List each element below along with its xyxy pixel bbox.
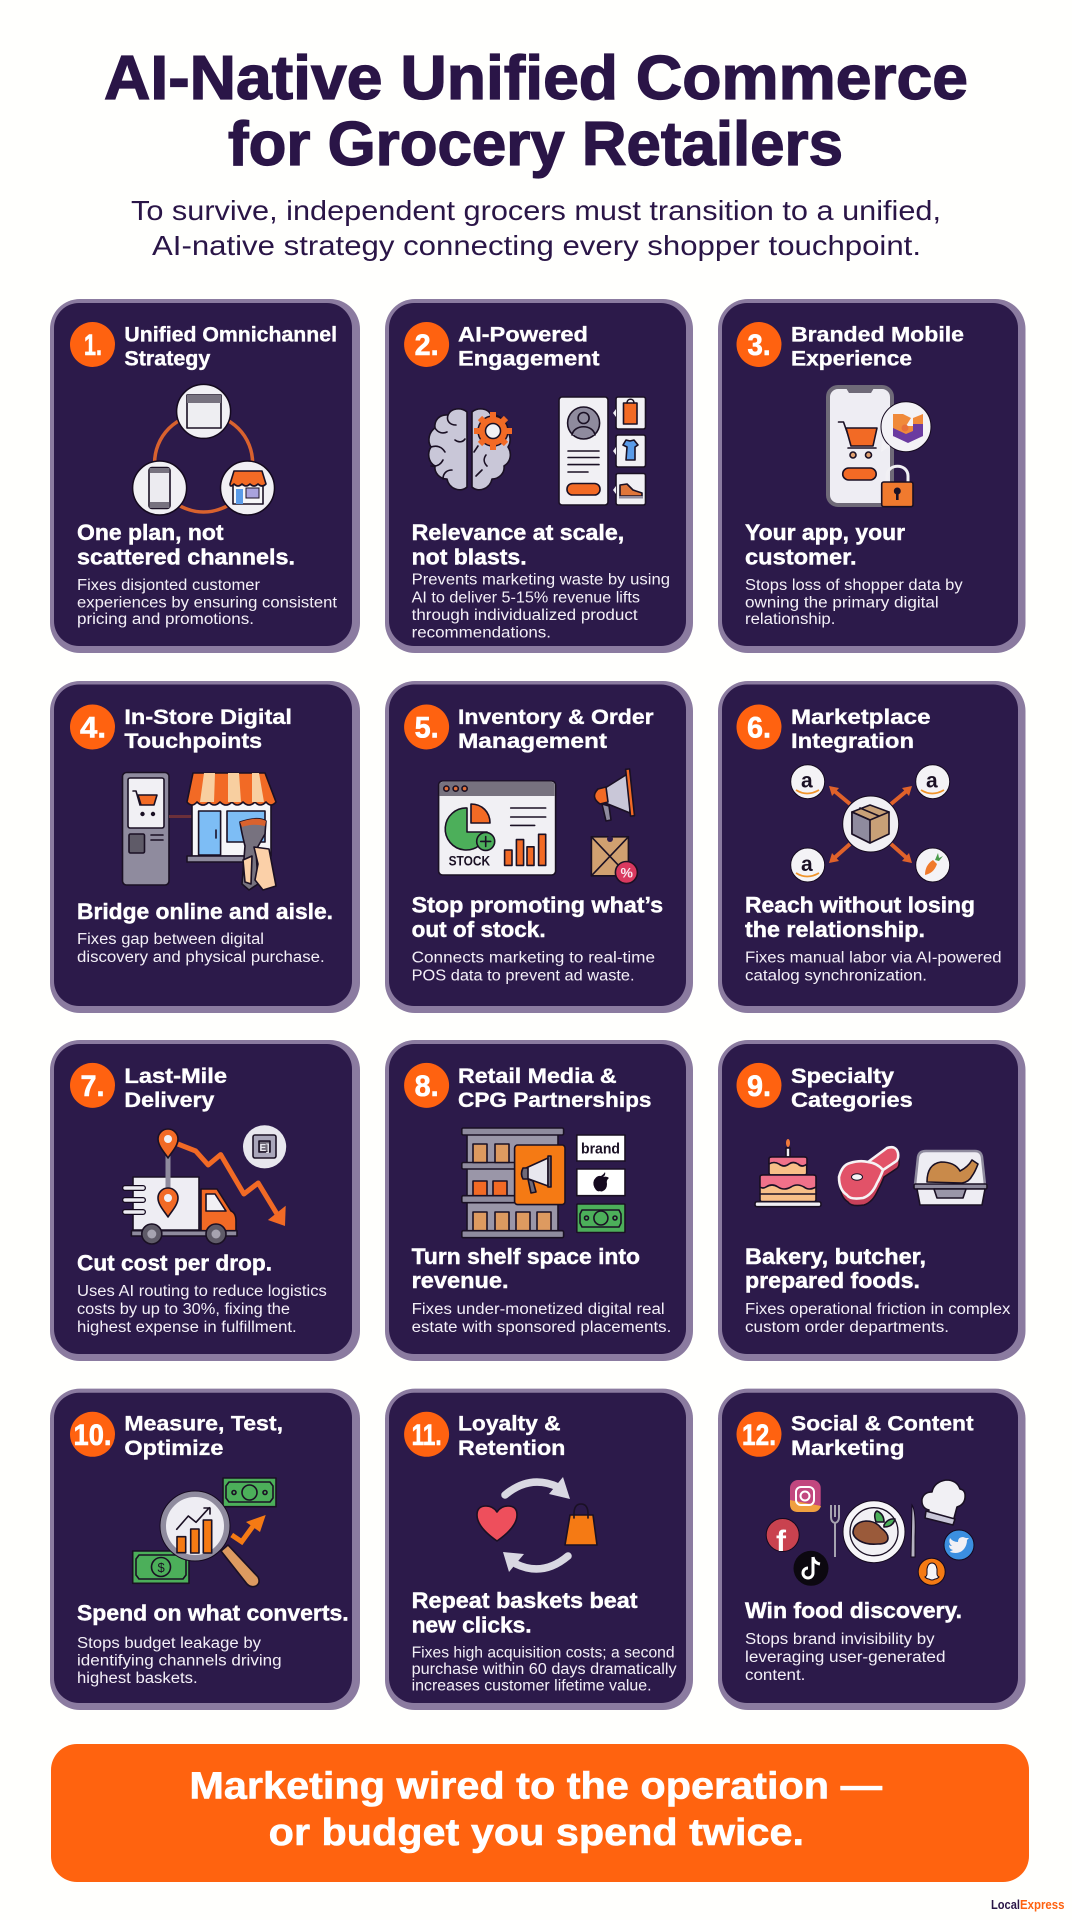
icon: megaphone <box>594 769 634 821</box>
body text 3: Stops loss of shopper data by <box>745 577 963 594</box>
panel: 7 last-mile delivery <box>50 1040 360 1361</box>
heading 11 <box>458 1413 565 1460</box>
icon: discounted parcel <box>591 836 637 884</box>
icon: prepared food container <box>914 1151 987 1205</box>
tagline 3: customer. <box>745 544 857 570</box>
body text 9: custom order departments. <box>745 1319 949 1336</box>
number badge 6: 6. <box>747 712 771 744</box>
connector line <box>169 815 192 818</box>
tagline 5: out of stock. <box>412 917 546 942</box>
heading 10 <box>124 1413 283 1460</box>
number badge 6 <box>736 704 782 750</box>
heading 9 <box>791 1065 913 1112</box>
panel: 5 inventory and order management <box>385 681 693 1013</box>
heading 5 <box>458 706 654 753</box>
tagline 11: new clicks. <box>412 1612 532 1638</box>
icon: marketplace hub: a <box>926 770 938 792</box>
icon: repeat cycle with heart and bag <box>477 1477 597 1572</box>
tagline 4: Bridge online and aisle. <box>77 899 333 924</box>
number badge 4: 4. <box>80 712 106 744</box>
icon: storefront with barcode scanner and hand <box>187 773 276 890</box>
icon: magnifier with chart and money <box>133 1478 276 1587</box>
body text 2: through individualized product <box>412 607 638 624</box>
heading 2 <box>458 324 600 370</box>
number badge 12 <box>736 1412 782 1457</box>
heading 10: Optimize <box>124 1437 223 1460</box>
icon: delivery truck with route pins: E] <box>260 1143 270 1154</box>
panel: 4 in-store digital touchpoints <box>50 681 360 1013</box>
panel: 8 retail media and CPG partnerships <box>385 1040 693 1361</box>
tagline 9: Bakery, butcher, <box>745 1244 926 1269</box>
tagline 3 <box>745 520 905 570</box>
heading 8 <box>458 1065 652 1112</box>
heading 10: Measure, Test, <box>124 1413 283 1436</box>
body text 4: discovery and physical purchase. <box>77 949 325 966</box>
heading 7 <box>124 1065 227 1112</box>
body text 9: Fixes operational friction in complex <box>745 1301 1011 1318</box>
heading 6 <box>791 706 930 753</box>
number badge 2 <box>404 322 449 367</box>
body text 1 <box>77 577 338 628</box>
tagline 2: not blasts. <box>412 544 527 570</box>
body text 3 <box>745 577 963 628</box>
body text 8 <box>412 1301 671 1336</box>
body text 3: owning the primary digital <box>745 594 939 612</box>
heading 5: Inventory & Order <box>458 706 654 729</box>
body text 7: costs by up to 30%, fixing the <box>77 1301 290 1318</box>
body text 12: Stops brand invisibility by <box>745 1631 935 1648</box>
heading 2: AI-Powered <box>458 324 588 346</box>
body text 8: estate with sponsored placements. <box>412 1319 671 1336</box>
icon: customer profile and product recommendations <box>559 397 646 505</box>
icon: steak <box>839 1147 899 1206</box>
number badge 7: 7. <box>80 1070 104 1103</box>
number badge 10: 10. <box>74 1419 112 1452</box>
panel: 11 loyalty and retention <box>385 1389 693 1710</box>
panel: 12 social and content marketing <box>718 1389 1026 1710</box>
number badge 11 <box>404 1412 449 1457</box>
body text 1: experiences by ensuring consistent <box>77 594 338 612</box>
body text 10 <box>77 1635 282 1687</box>
panel: 10 measure, test, optimize <box>50 1389 360 1710</box>
heading 4: In-Store Digital <box>124 706 292 729</box>
body text 10: identifying channels driving <box>77 1653 282 1670</box>
icon: magnifier with chart and money: $ <box>158 1560 166 1575</box>
tagline 12: Win food discovery. <box>745 1598 962 1623</box>
body text 6: catalog synchronization. <box>745 968 927 984</box>
icon: social media and plated food: f <box>776 1525 787 1558</box>
body text 7: Uses AI routing to reduce logistics <box>77 1283 327 1300</box>
title: AI-Native Unified Commerce <box>104 44 968 113</box>
body text 8: Fixes under-monetized digital real <box>412 1301 665 1318</box>
body text 3: relationship. <box>745 611 835 628</box>
heading 1: Unified Omnichannel <box>124 324 337 346</box>
number badge 5: 5. <box>415 712 439 744</box>
icon: retail shelf with sponsored placement <box>462 1128 565 1238</box>
tagline 11: Repeat baskets beat <box>412 1588 638 1613</box>
number badge 11: 11. <box>412 1419 442 1452</box>
number badge 9 <box>736 1063 782 1108</box>
heading 12: Social & Content <box>791 1413 974 1436</box>
tagline 1 <box>77 520 295 570</box>
body text 10: Stops budget leakage by <box>77 1635 261 1652</box>
tagline 10: Spend on what converts. <box>77 1601 349 1626</box>
body text 12: content. <box>745 1667 805 1684</box>
number badge 3 <box>736 322 782 367</box>
tagline 5 <box>412 893 663 942</box>
body text 11: purchase within 60 days dramatically <box>412 1661 677 1678</box>
icon: phone with cart, brand and lock <box>828 387 931 507</box>
number badge 8: 8. <box>415 1070 439 1103</box>
subtitle: AI-native strategy connecting every shopper touchpoint. <box>152 230 921 261</box>
heading 3 <box>791 324 964 370</box>
heading 3: Experience <box>791 348 912 370</box>
tagline 8: revenue. <box>412 1268 509 1293</box>
subtitle: To survive, independent grocers must transition to a unified, <box>131 195 941 226</box>
heading 7: Last-Mile <box>124 1065 227 1088</box>
body text 6 <box>745 950 1002 984</box>
number badge 2: 2. <box>415 329 439 362</box>
icon: marketplace hub: a <box>801 853 813 876</box>
number badge 8 <box>404 1063 449 1108</box>
icon: brand logos and money <box>577 1135 625 1232</box>
tagline 7: Cut cost per drop. <box>77 1251 272 1276</box>
icon: delivery truck with route pins <box>125 1125 286 1244</box>
tagline 6: the relationship. <box>745 917 925 942</box>
logo: LocalExpress <box>991 1898 1065 1912</box>
body text 6: Fixes manual labor via AI-powered <box>745 950 1002 967</box>
heading 2: Engagement <box>458 348 600 370</box>
number badge 3: 3. <box>748 329 770 362</box>
body text 11 <box>412 1644 677 1695</box>
heading 8: Retail Media & <box>458 1065 617 1088</box>
icon: marketplace hub <box>791 765 950 882</box>
tagline 2 <box>412 520 624 570</box>
body text 2: AI to deliver 5-15% revenue lifts <box>412 590 640 606</box>
tagline 5: Stop promoting what’s <box>412 893 663 918</box>
closing banner: Marketing wired to the operation — <box>189 1766 882 1808</box>
tagline 9 <box>745 1244 926 1293</box>
heading 3: Branded Mobile <box>791 324 964 346</box>
tagline 8 <box>412 1244 640 1293</box>
tagline 1: One plan, not <box>77 520 224 545</box>
icon: discounted parcel: % <box>620 864 634 880</box>
icon: three connected channels <box>133 384 274 515</box>
tagline 9: prepared foods. <box>745 1268 920 1293</box>
body text 9 <box>745 1301 1011 1336</box>
number badge 12: 12. <box>742 1419 776 1452</box>
body text 7 <box>77 1283 327 1336</box>
body text 2: Prevents marketing waste by using <box>412 572 670 588</box>
closing banner: or budget you spend twice. <box>269 1812 804 1854</box>
body text 1: pricing and promotions. <box>77 611 254 628</box>
body text 11: Fixes high acquisition costs; a second <box>412 1644 675 1662</box>
panel: 2 AI-powered engagement <box>385 299 693 653</box>
number badge 9: 9. <box>747 1070 771 1103</box>
body text 5: Connects marketing to real-time <box>412 950 655 967</box>
title: for Grocery Retailers <box>228 110 843 179</box>
heading 11: Retention <box>458 1437 565 1460</box>
icon: cake <box>755 1139 821 1207</box>
heading 6: Integration <box>791 730 914 753</box>
tagline 6 <box>745 893 975 942</box>
tagline 3: Your app, your <box>745 520 905 545</box>
heading 7: Delivery <box>124 1089 215 1112</box>
heading 5: Management <box>458 730 607 753</box>
body text 2 <box>412 572 670 642</box>
icon: brain with gear <box>429 409 512 490</box>
logo: LocalExpress: Express <box>1020 1898 1065 1912</box>
logo: LocalExpress: Local <box>991 1898 1020 1912</box>
title <box>104 44 968 179</box>
tagline 6: Reach without losing <box>745 893 975 918</box>
body text 11: increases customer lifetime value. <box>412 1678 652 1695</box>
body text 12: leveraging user-generated <box>745 1649 946 1666</box>
subtitle <box>131 195 941 261</box>
icon: marketplace hub: a <box>801 770 813 792</box>
tagline 2: Relevance at scale, <box>412 520 624 545</box>
tagline 11 <box>412 1588 638 1638</box>
heading 1: Strategy <box>124 348 211 370</box>
icon: brand logos and money: brand <box>581 1140 620 1158</box>
heading 9: Specialty <box>791 1065 894 1088</box>
tagline 1: scattered channels. <box>77 544 295 570</box>
tagline 8: Turn shelf space into <box>412 1244 640 1269</box>
heading 6: Marketplace <box>791 706 930 729</box>
icon: stock dashboard <box>439 781 556 875</box>
panel: 3 branded mobile experience <box>718 299 1026 653</box>
number badge 4 <box>70 704 115 750</box>
heading 1 <box>124 324 337 370</box>
panel: 1 unified omnichannel strategy <box>50 299 360 653</box>
number badge 1 <box>70 322 115 367</box>
body text 5 <box>412 950 655 984</box>
heading 4: Touchpoints <box>124 730 262 753</box>
heading 11: Loyalty & <box>458 1413 561 1436</box>
icon: stock dashboard: STOCK <box>449 853 490 868</box>
number badge 5 <box>404 704 449 750</box>
panel: 6 marketplace integration <box>718 681 1026 1013</box>
heading 8: CPG Partnerships <box>458 1089 652 1112</box>
heading 9: Categories <box>791 1089 913 1112</box>
body text 1: Fixes disjonted customer <box>77 577 260 594</box>
heading 12: Marketing <box>791 1437 904 1460</box>
number badge 10 <box>70 1412 115 1457</box>
closing banner <box>51 1744 1029 1882</box>
body text 7: highest expense in fulfillment. <box>77 1319 297 1336</box>
number badge 1: 1. <box>84 329 102 362</box>
panel: 9 specialty categories <box>718 1040 1026 1361</box>
body text 10: highest baskets. <box>77 1670 198 1687</box>
heading 4 <box>124 706 292 753</box>
number badge 7 <box>70 1063 115 1108</box>
icon: social media and plated food <box>766 1480 974 1586</box>
body text 2: recommendations. <box>412 624 551 642</box>
icon: kiosk <box>122 772 169 885</box>
body text 5: POS data to prevent ad waste. <box>412 968 635 984</box>
heading 12 <box>791 1413 974 1460</box>
body text 4 <box>77 931 325 966</box>
body text 4: Fixes gap between digital <box>77 931 264 948</box>
body text 12 <box>745 1631 946 1684</box>
